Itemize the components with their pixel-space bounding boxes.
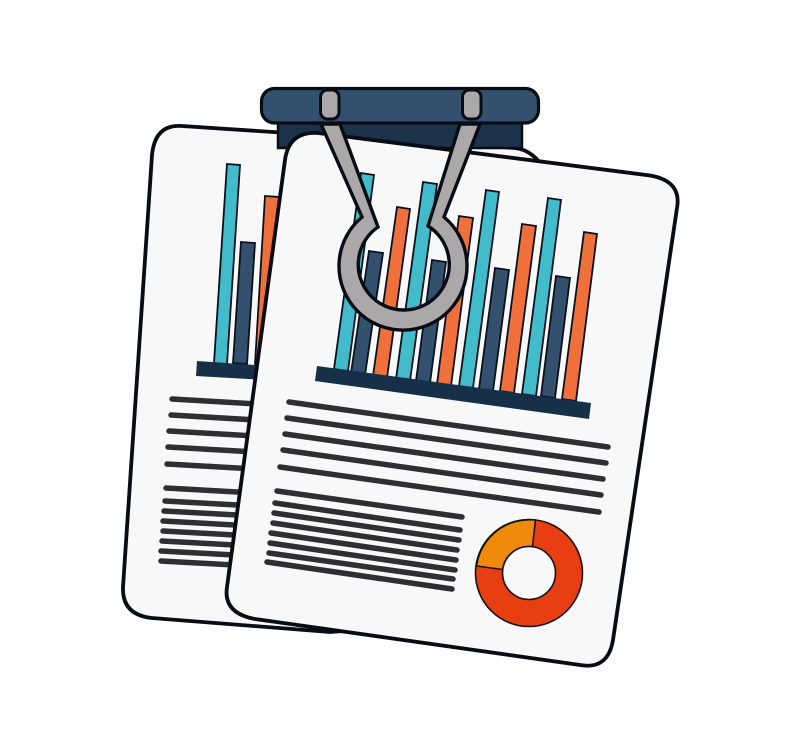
donut chart [476, 520, 582, 626]
back page bar chart [196, 164, 300, 382]
clip right tab [462, 90, 481, 119]
clip wire loop [321, 124, 480, 330]
back page text lines [161, 399, 290, 568]
back page sheet [123, 126, 545, 632]
front page sheet [227, 133, 678, 666]
panel: front page [227, 133, 678, 666]
clip bar [262, 88, 538, 123]
panel: back page [123, 126, 545, 632]
binder clip [262, 88, 538, 330]
clip left tab [320, 90, 339, 119]
binder clip rear plate [278, 122, 522, 148]
front page text lines [267, 402, 608, 589]
front page bar chart [315, 173, 597, 419]
